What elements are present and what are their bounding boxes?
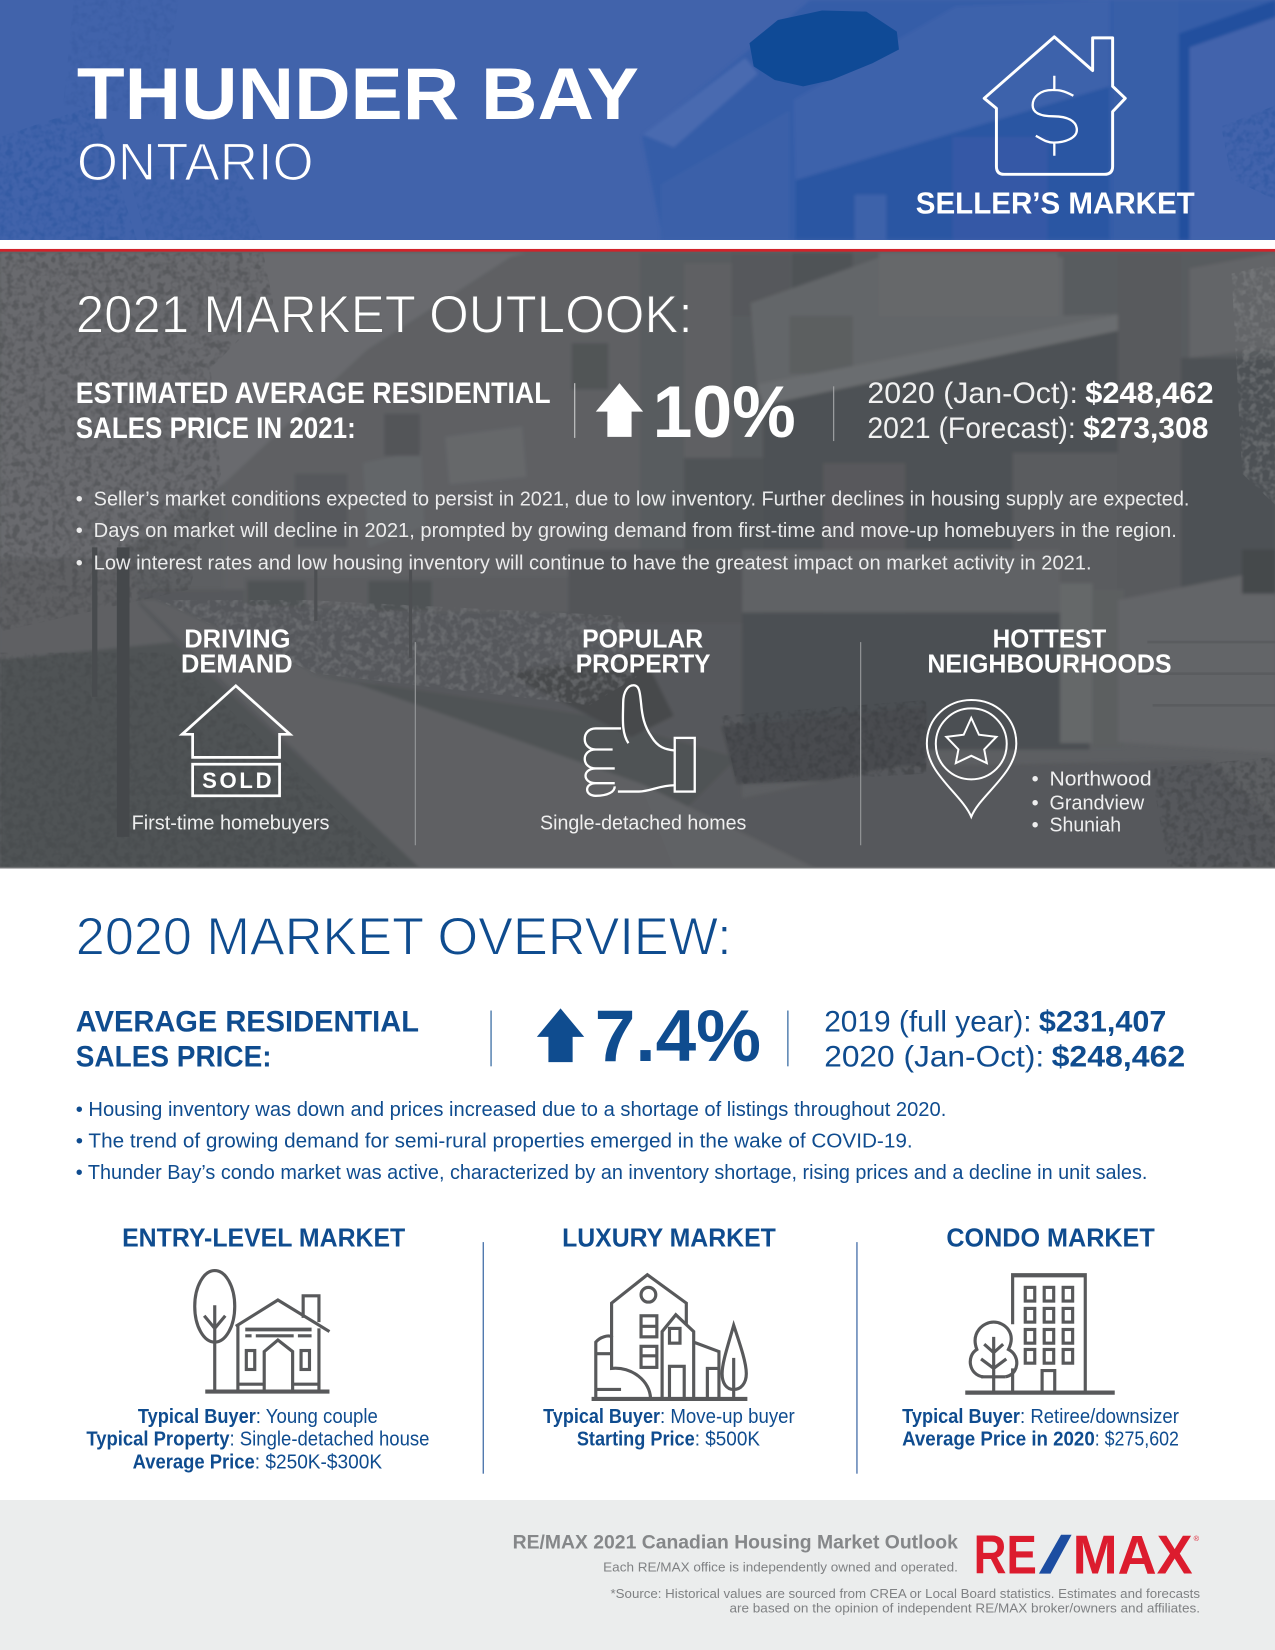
- panel: driving demand: DRIVING: [184, 623, 291, 653]
- label: seller's market: SELLER’S MARKET: [916, 187, 1195, 221]
- outlook background photo: [0, 252, 1275, 869]
- neighbourhood list: •: [1032, 792, 1039, 814]
- figure: 10 percent: 10%: [653, 370, 796, 453]
- icon: house and tree: [195, 1271, 329, 1392]
- panel: luxury market: Starting Price: [577, 1428, 695, 1450]
- panel: hottest neighbourhoods: NEIGHBOURHOODS: [927, 649, 1172, 679]
- panel: luxury market: [543, 1222, 795, 1450]
- outlook bullet points: •: [76, 552, 83, 574]
- logo: RE/MAX: [974, 1524, 1200, 1586]
- average price label: [76, 1006, 419, 1073]
- icon: house with dollar sign: [984, 37, 1125, 174]
- figure: 7.4 percent: 7.4%: [595, 994, 761, 1077]
- white and red divider band: [0, 240, 1275, 252]
- icon: condo building: [965, 1275, 1115, 1393]
- outlook bullet points: •: [76, 520, 83, 542]
- price comparison: $248,462: [1052, 1040, 1185, 1073]
- outlook bullet points: •: [76, 488, 83, 510]
- panel: condo market: : $275,602: [1095, 1428, 1179, 1450]
- neighbourhood list: [1032, 768, 1152, 837]
- panel: luxury market: : Move-up buyer: [660, 1406, 795, 1428]
- icon: thumbs up: [585, 685, 695, 796]
- average price label: SALES PRICE:: [76, 1040, 272, 1073]
- outlook bullet points: Days on market will decline in 2021, prompted by growing demand from first-time and move-up homebuyers in the region.: [94, 520, 1177, 542]
- divider: [833, 386, 834, 441]
- panel: condo market: : Retiree/downsizer: [1020, 1406, 1179, 1428]
- price comparison: 2020 (Jan-Oct):: [867, 377, 1078, 410]
- outlook bullet points: Seller’s market conditions expected to persist in 2021, due to low inventory. Further declines in housing supply are expected.: [94, 488, 1189, 510]
- divider: [787, 1011, 788, 1066]
- divider: [483, 1242, 484, 1474]
- price comparison: 2020 (Jan-Oct):: [824, 1040, 1044, 1073]
- panel: entry-level market: : Young couple: [256, 1406, 378, 1428]
- panel: driving demand: DEMAND: [181, 649, 293, 679]
- overview bullet points: [76, 1099, 1147, 1184]
- overview bullet points: • Housing inventory was down and prices increased due to a shortage of listings throughout 2020.: [76, 1099, 946, 1121]
- panel: luxury market: LUXURY MARKET: [562, 1222, 776, 1252]
- panel: popular property: [540, 623, 746, 834]
- logo: RE/MAX: ®: [1194, 1534, 1200, 1543]
- title: ONTARIO: [77, 133, 314, 192]
- footer ownership note: Each RE/MAX office is independently owned and operated.: [603, 1561, 958, 1575]
- logo: RE/MAX: MAX: [1073, 1524, 1193, 1586]
- price comparison: 2019 (full year):: [824, 1006, 1032, 1039]
- icon: up arrow: [537, 1008, 584, 1062]
- divider: [491, 1011, 492, 1066]
- divider: [856, 1242, 858, 1474]
- panel: entry-level market: : $250K-$300K: [255, 1451, 383, 1473]
- footer title: RE/MAX 2021 Canadian Housing Market Outlook: [513, 1532, 958, 1553]
- price comparison: $248,462: [1085, 377, 1214, 410]
- price comparison: $231,407: [1039, 1006, 1166, 1039]
- icon: large house: [592, 1275, 747, 1399]
- panel: hottest neighbourhoods: [927, 623, 1172, 837]
- estimated average price label: [76, 377, 551, 445]
- overview bullet points: • The trend of growing demand for semi-rural properties emerged in the wake of COVID-19.: [76, 1130, 913, 1152]
- estimated average price label: ESTIMATED AVERAGE RESIDENTIAL: [76, 377, 551, 410]
- panel: condo market: Typical Buyer: [902, 1406, 1020, 1428]
- header background photo: [0, 0, 1275, 240]
- panel: entry-level market: [86, 1222, 429, 1473]
- panel: luxury market: : $500K: [695, 1428, 761, 1450]
- panel: popular property: Single-detached homes: [540, 812, 746, 834]
- estimated average price label: SALES PRICE IN 2021:: [76, 412, 356, 445]
- panel: luxury market: Typical Buyer: [543, 1406, 660, 1428]
- neighbourhood list: Shuniah: [1049, 815, 1121, 837]
- panel: condo market: Average Price in 2020: [902, 1428, 1095, 1450]
- outlook bullet points: Low interest rates and low housing inventory will continue to have the greatest impact on market activity in 2021.: [94, 552, 1092, 574]
- logo: RE/MAX: RE: [974, 1524, 1037, 1586]
- footer panel: [0, 1500, 1275, 1650]
- price comparison: [824, 1006, 1185, 1073]
- overview bullet points: • Thunder Bay’s condo market was active, characterized by an inventory shortage, rising prices and a decline in unit sales.: [76, 1162, 1147, 1184]
- panel: hottest neighbourhoods: HOTTEST: [993, 623, 1106, 653]
- source note: [611, 1587, 1200, 1616]
- panel: entry-level market: Typical Buyer: [138, 1406, 256, 1428]
- neighbourhood list: Grandview: [1049, 792, 1145, 814]
- average price label: AVERAGE RESIDENTIAL: [76, 1006, 419, 1039]
- price comparison: $273,308: [1083, 412, 1208, 445]
- title: THUNDER BAY: [77, 52, 639, 135]
- divider: [860, 642, 861, 845]
- icon: map pin with star: [927, 700, 1016, 817]
- price comparison: [867, 377, 1214, 445]
- icon: sold house: [182, 686, 290, 796]
- neighbourhood list: •: [1032, 815, 1039, 837]
- panel: entry-level market: ENTRY-LEVEL MARKET: [122, 1222, 405, 1252]
- panel: entry-level market: Typical Property: [86, 1428, 230, 1450]
- neighbourhood list: Northwood: [1049, 768, 1152, 790]
- panel: condo market: [902, 1222, 1179, 1450]
- heading: 2020 market overview: 2020 MARKET OVERVIEW:: [76, 908, 732, 967]
- divider: [574, 383, 575, 438]
- panel: popular property: POPULAR: [582, 623, 703, 653]
- price comparison: 2021 (Forecast):: [867, 412, 1076, 445]
- panel: entry-level market: : Single-detached house: [229, 1428, 429, 1450]
- icon: sold house: SOLD: [202, 768, 272, 793]
- icon: up arrow: [596, 383, 643, 437]
- panel: popular property: PROPERTY: [576, 649, 711, 679]
- panel: entry-level market: Average Price: [133, 1451, 255, 1473]
- title: [77, 52, 639, 192]
- outlook bullet points: [76, 488, 1189, 574]
- panel: driving demand: [132, 623, 329, 834]
- panel: condo market: CONDO MARKET: [946, 1222, 1155, 1252]
- source note: are based on the opinion of independent RE/MAX broker/owners and affiliates.: [729, 1602, 1200, 1616]
- divider: [415, 642, 416, 845]
- panel: driving demand: First-time homebuyers: [132, 812, 329, 834]
- heading: 2021 market outlook: 2021 MARKET OUTLOOK:: [76, 286, 693, 345]
- neighbourhood list: •: [1032, 768, 1039, 790]
- source note: *Source: Historical values are sourced from CREA or Local Board statistics. Estimates and forecasts: [611, 1587, 1200, 1601]
